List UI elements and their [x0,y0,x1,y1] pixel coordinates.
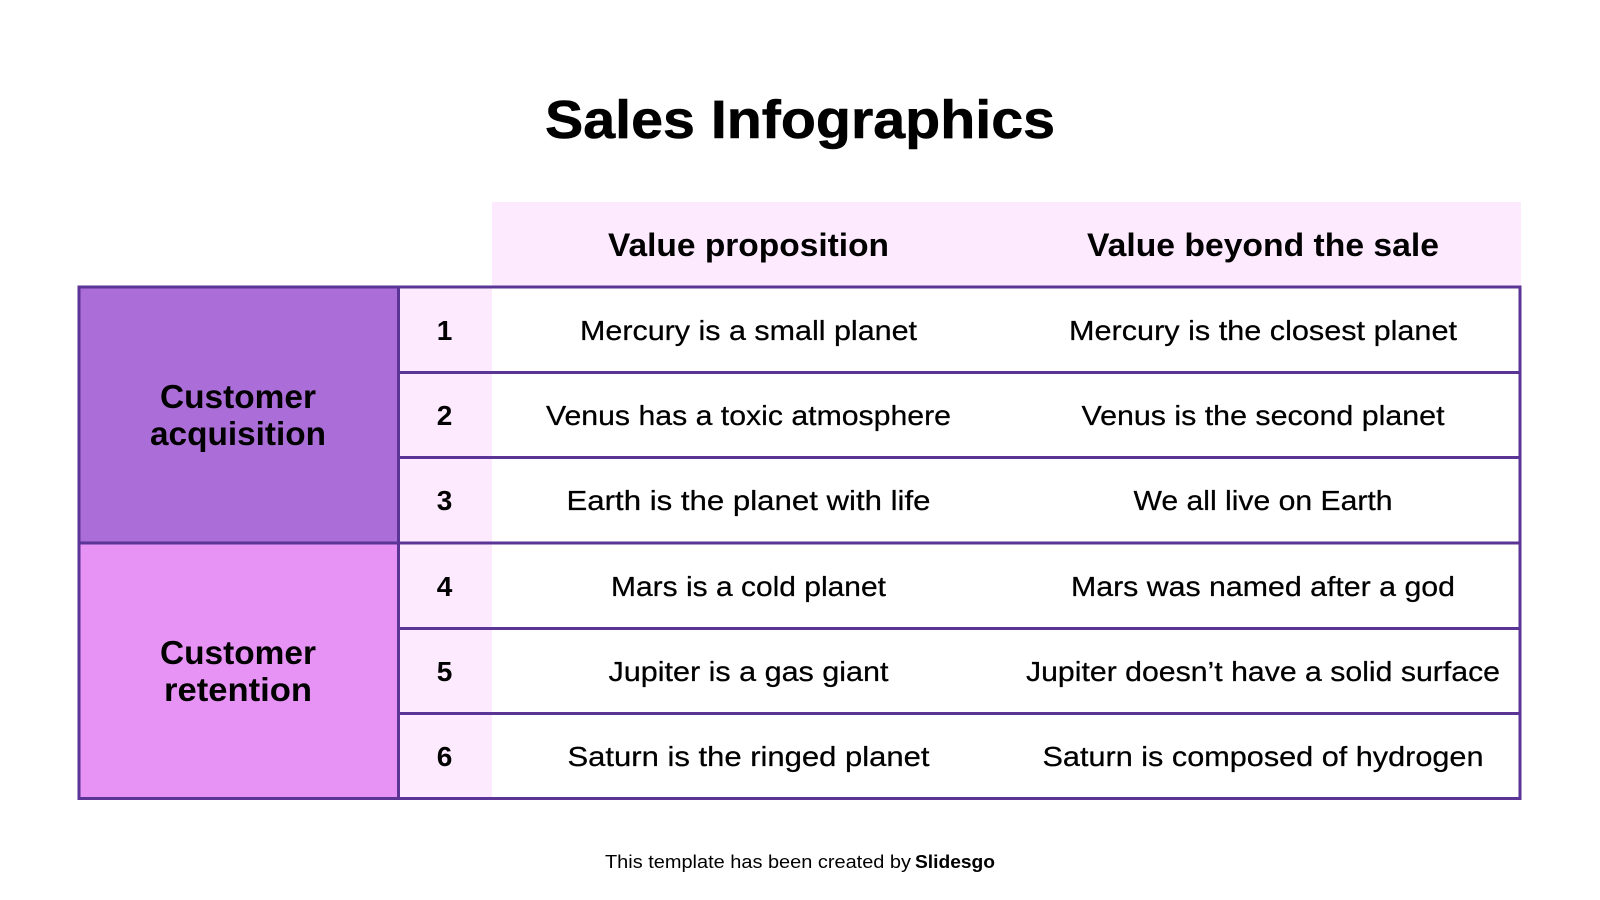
footer credit: Slidesgo [915,852,995,872]
value beyond the sale column [1026,315,1500,772]
number column: 1 [437,315,452,346]
value beyond the sale column: Saturn is composed of hydrogen [1042,741,1484,772]
number column: 2 [437,400,452,431]
panel: customer acquisition [79,287,398,543]
panel: customer acquisition: acquisition [150,415,326,452]
value beyond the sale column: Venus is the second planet [1082,400,1445,431]
value beyond the sale column: Mercury is the closest planet [1069,315,1457,346]
number column: 5 [437,656,452,687]
value proposition column: Jupiter is a gas giant [608,656,889,687]
column heading: value beyond the sale: Value beyond the sale [1087,227,1439,263]
number column: 6 [437,741,452,772]
value proposition column: Saturn is the ringed planet [568,741,930,772]
title: Sales Infographics [545,90,1055,150]
number column: 3 [437,485,452,516]
value proposition column: Venus has a toxic atmosphere [546,400,951,431]
panel: customer retention [79,543,398,799]
value beyond the sale column: Jupiter doesn’t have a solid surface [1026,656,1500,687]
value proposition column: Earth is the planet with life [566,485,930,516]
panel: customer retention: Customer [160,634,316,671]
value beyond the sale column: Mars was named after a god [1071,571,1455,602]
header band [492,202,1521,287]
column heading: value proposition: Value proposition [608,227,889,263]
panel: customer acquisition: Customer [160,378,316,415]
footer credit: This template has been created by [605,852,911,872]
number column [398,287,492,799]
number column: 4 [437,571,453,602]
value proposition column: Mercury is a small planet [580,315,917,346]
panel: customer retention: retention [164,671,312,708]
value proposition column: Mars is a cold planet [611,571,886,602]
table grid lines [79,287,1520,798]
value beyond the sale column: We all live on Earth [1134,485,1392,516]
value proposition column [546,315,951,772]
